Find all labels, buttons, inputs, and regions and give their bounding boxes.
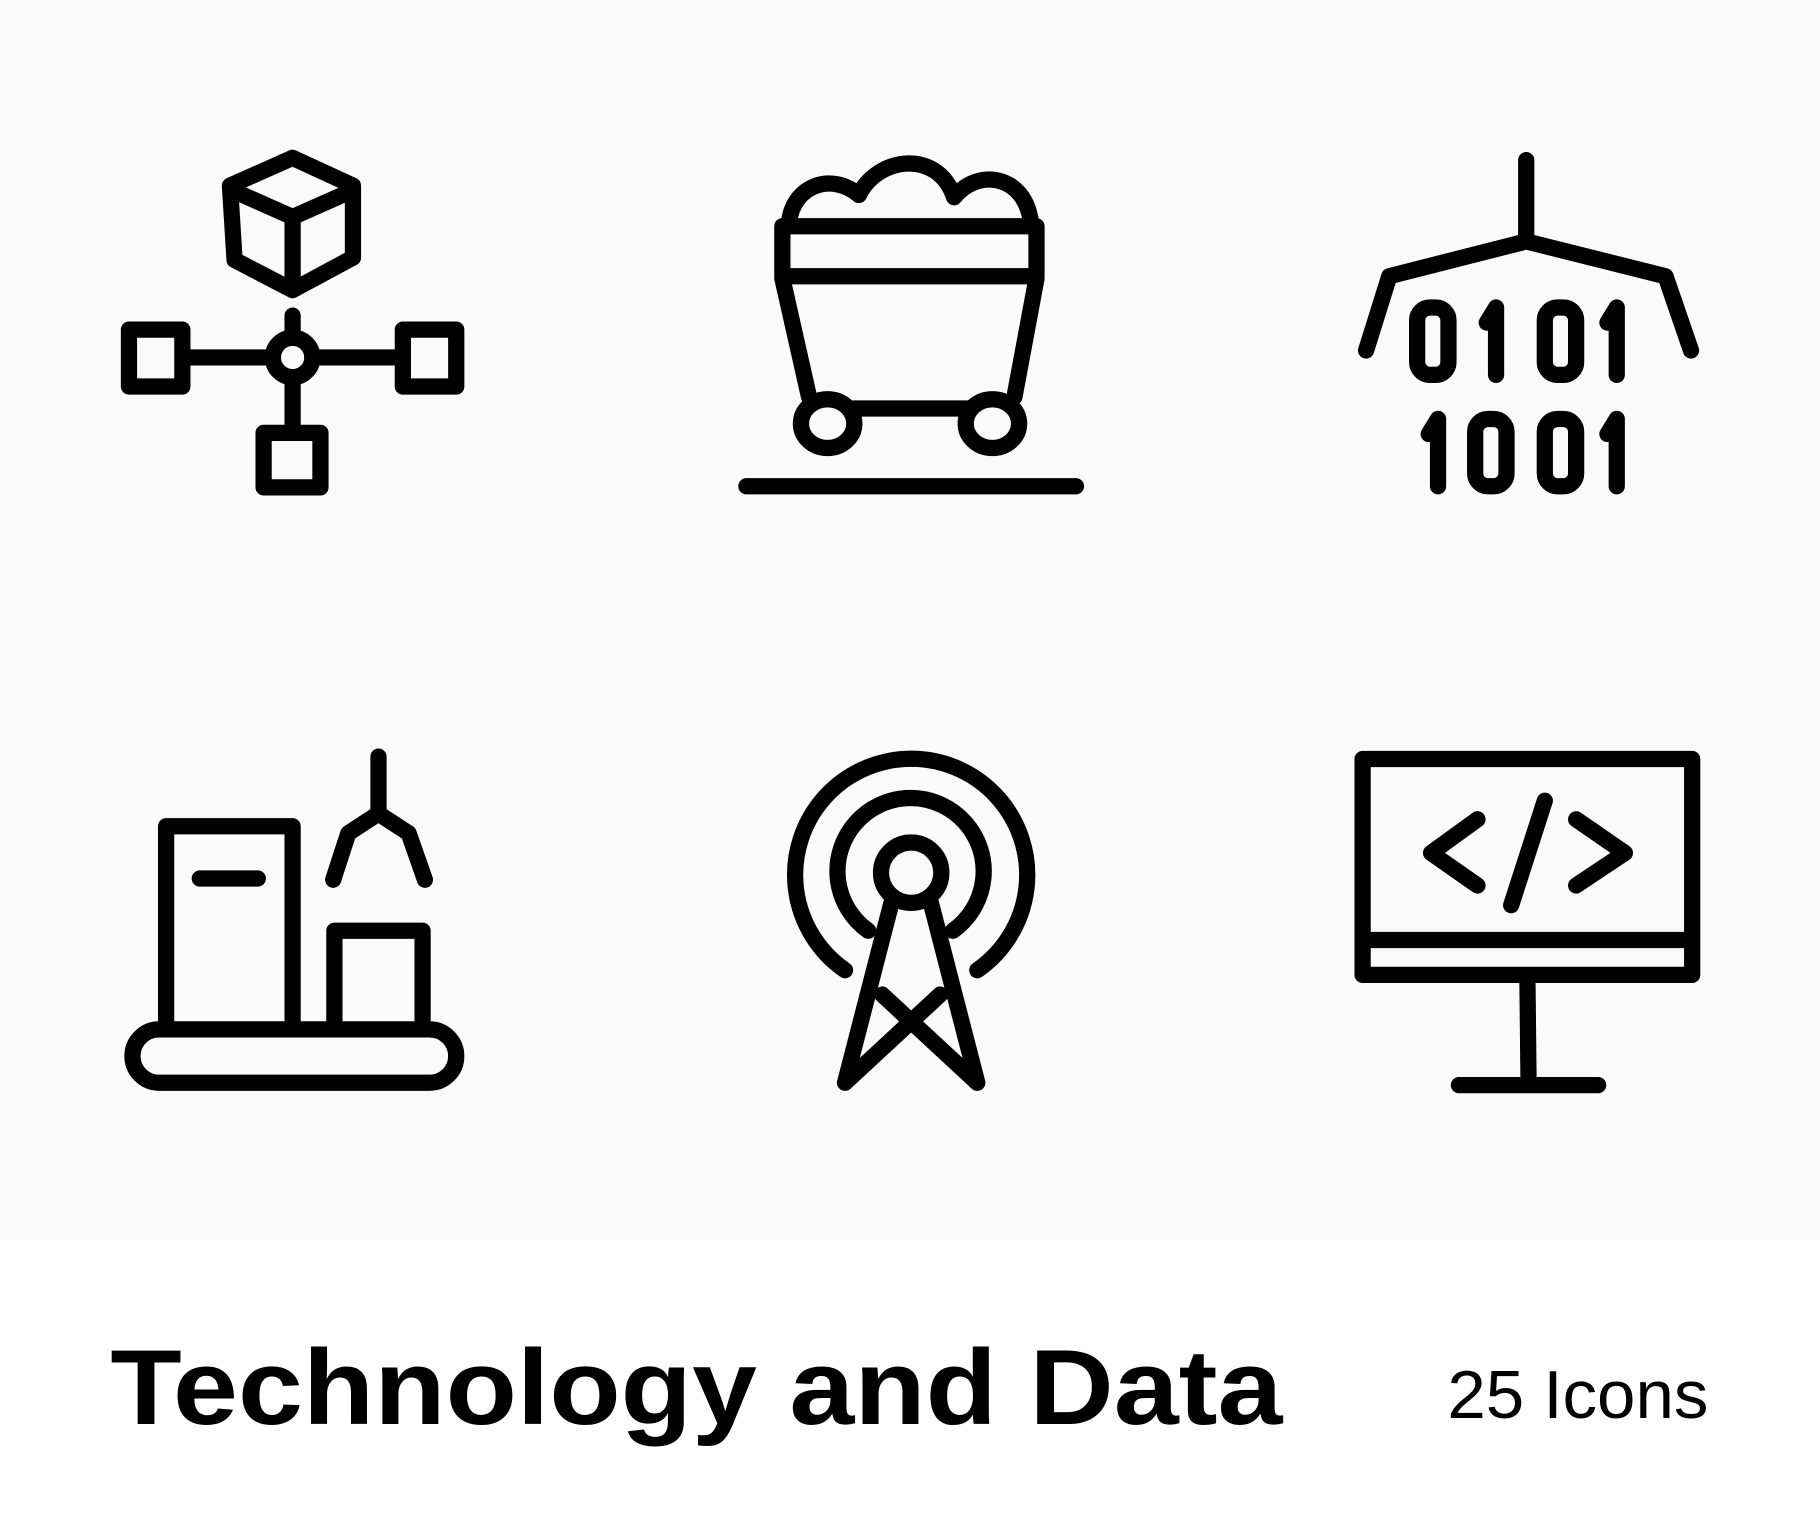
icon: network cube	[129, 158, 456, 487]
title: Technology and Data	[110, 1327, 1284, 1447]
icon: signal tower	[795, 759, 1027, 1083]
icon: factory conveyor	[132, 757, 456, 1083]
icon: monitor code	[1363, 759, 1692, 1085]
icon: binary data	[1366, 160, 1691, 486]
subtitle: icon count: 25 Icons	[1447, 1358, 1708, 1433]
icon: mine cart	[746, 163, 1076, 486]
